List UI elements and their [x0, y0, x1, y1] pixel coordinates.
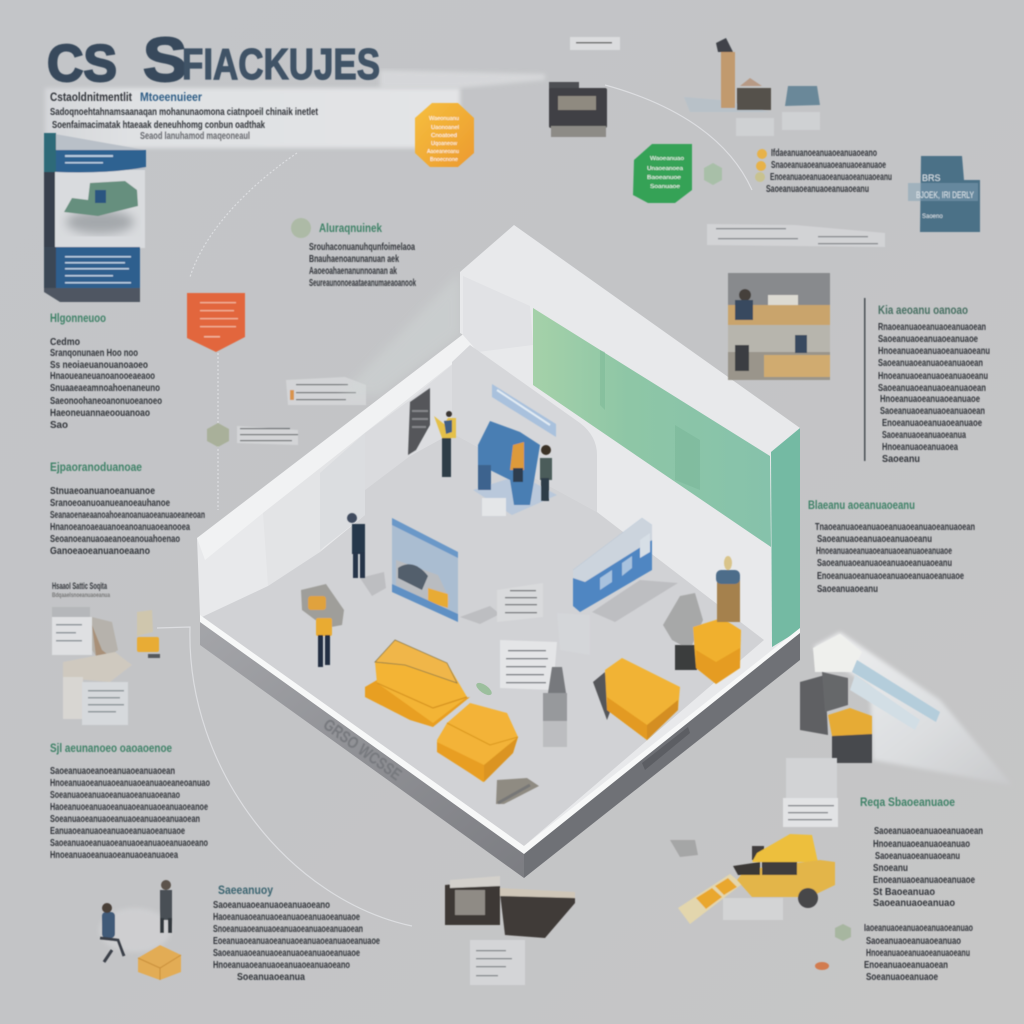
- orange badge: Uqoaneow: [431, 141, 457, 147]
- bullet list top right: Ifdaeanuanoeanuaoeanuaoeano: [771, 148, 877, 159]
- section: left upper text: Ss neoiaeuanouanoaoeo: [50, 360, 148, 371]
- card under desk: [470, 940, 525, 985]
- section: right upper text: Saoeanuaoeanuaoeanuaoean: [880, 406, 985, 417]
- section: right lower text: Saoeanuaoeanuao: [873, 898, 955, 909]
- section: left upper text: Saeonoohaneoanonuoeanoeo: [50, 396, 162, 407]
- section: right upper text: Kia aeoanu oanoao: [878, 303, 968, 317]
- section: left middle text: Sranoeoanuoanueanoeauhanoe: [50, 498, 170, 509]
- small icon beside vehicle: [670, 840, 698, 857]
- subtitle and intro text: Soenfaimacimatak htaeaak deneuhhomg conbun oadthak: [52, 120, 265, 131]
- section: right upper text: Hnoeanuaoeanuaoeanuaoe: [880, 394, 980, 405]
- section: right upper text: [864, 298, 990, 465]
- section: bottom right text: Iaoeanuaoeanuaoeanuaoeanuao: [864, 923, 973, 934]
- green badge: Waoeanuao: [650, 156, 684, 162]
- yellow vehicle centre-right: [593, 658, 680, 740]
- section: bottom left text: Haoeanuaoeanuaoeanuaoeanuaoeanuaoe: [213, 912, 360, 923]
- section: bottom left text: Soeanuaoeanua: [237, 972, 305, 983]
- pale glass gable: [340, 272, 460, 395]
- title: CS: [47, 35, 117, 93]
- section: bottom left text: [213, 883, 380, 983]
- section: left upper text: Hlgonneuoo: [50, 311, 106, 325]
- house diorama: [197, 225, 800, 878]
- note cards lower right: [783, 758, 838, 827]
- icon: dark printer: [549, 82, 607, 137]
- worker at wall: [434, 411, 456, 477]
- section: right upper text: Hnoeanuaoeanuaoeanuaoeanu: [878, 371, 988, 382]
- marker and cards left of house: [207, 377, 366, 447]
- orange badge: Aaoeaneoanu: [427, 149, 459, 155]
- section: right middle text: Enoeanuaoeanuaoeanuaoeanuaoeanuaoe: [817, 571, 964, 582]
- section: right upper text: Enoeanuaoeanuaoeanuaoe: [882, 418, 982, 429]
- worker with yellow crate: [301, 584, 344, 667]
- bullet list top right: [755, 148, 892, 195]
- section: right upper text: Rnaoeanuaoeanuaoeanuaoean: [878, 322, 986, 333]
- section: bottom right text: Enoeanuaoeanuaoean: [864, 960, 948, 971]
- section: right upper text: Hnoeanuaoeanuaoeanuaoeanu: [878, 346, 990, 357]
- section: left middle text: Ganoeaoeanuanoeaano: [50, 546, 150, 557]
- orange badge: Uaonoanel: [431, 125, 459, 131]
- wall screen: [408, 388, 430, 455]
- green badge: Baoeanuoe: [647, 175, 681, 181]
- section: left lower text: Saoeanuaoeanoeanuaoeanuaoean: [50, 766, 175, 777]
- section: bottom right text: Hnoeanuaoeanuaoeanuaoeanu: [866, 948, 970, 959]
- small figure at crate: [496, 778, 539, 804]
- section: right lower text: Saoeanuaoeanuaoeanu: [875, 851, 960, 862]
- section: bottom right text: Soeanuaoeanuaoe: [866, 972, 938, 983]
- section: right lower text: Hnoeanuaoeanuaoeanuao: [873, 839, 970, 850]
- subtitle and intro text: Mtoeenuieer: [140, 90, 202, 104]
- section: left upper text: Sao: [50, 420, 68, 431]
- section: top centre text: Seureaunonoeaataeanumaeaoanook: [309, 278, 416, 289]
- bullet list top right: Enoeanuaoeanuaoeanuaoeanuaoeanu: [770, 172, 892, 183]
- figure and grey column: [543, 667, 567, 747]
- section: left upper text: Hnaoueaneuanoanooeaeaoo: [50, 371, 155, 382]
- blue box: Saoeno: [922, 214, 943, 220]
- column with lamp: [716, 556, 740, 622]
- orange badge: Cnoatoed: [431, 133, 457, 139]
- subtitle and intro text: Seaod lanuhamod maqeoneaul: [140, 131, 250, 142]
- section: right middle text: Blaeanu aoeanuaoeanu: [808, 498, 915, 512]
- section: left middle text: Ejpaoranoduanoae: [50, 460, 142, 474]
- title: FIACKUJES: [182, 40, 380, 89]
- small heading and left vignette: Bdqaaelsnoeanuaoeanua: [52, 593, 111, 599]
- title: [47, 26, 380, 95]
- blue box: [908, 156, 980, 232]
- brochure panel: [44, 133, 146, 302]
- section: right lower text: Reqa Sbaoeanuaoe: [860, 795, 955, 809]
- section: right upper text: Saoeanuaoeanuaoeanuaoean: [878, 358, 983, 369]
- blue workstation: [473, 421, 557, 516]
- plinth: [200, 620, 800, 878]
- blue box: BRS: [922, 173, 941, 183]
- top card: [570, 37, 620, 50]
- green badge: [633, 144, 692, 203]
- section: left lower text: Haoeanuoeanuaoeanuaoeanuaoeanuaoeanoe: [50, 802, 208, 813]
- red-orange tag: [187, 293, 245, 352]
- section: left middle text: [50, 460, 205, 557]
- standing person left: [347, 513, 365, 578]
- title band: [45, 70, 545, 148]
- section: right lower text: Saoeanuaoeanuaoeanuaoean: [874, 826, 983, 837]
- section: bottom left text: Saoeanuaoeanuaoeanuaoeano: [213, 900, 330, 911]
- section: right upper text: Hnoeanuaoeanuaoea: [882, 442, 958, 453]
- section: right middle text: Saoeanuaoeanuaoeanuaoeanu: [817, 534, 932, 545]
- section: bottom left text: Saoeanuaoeanuaoeanuaoeanuaoeanuaoe: [213, 948, 360, 959]
- section: bottom left text: Eoeanuaoeanuaoeanuaoeanuaoeanuaoeanuaoe: [213, 936, 380, 947]
- section: bottom left text: Saeeanuoy: [218, 883, 273, 897]
- brochure illustration: [64, 181, 138, 234]
- yellow vehicle lower right: [678, 834, 835, 924]
- section: right middle text: Saoeanuaoeanuaoeanuaoeanuaoeanu: [817, 558, 952, 569]
- section: left upper text: Snuaaeaeamnoahoenaneuno: [50, 383, 160, 394]
- plinth: GRSO WCSSE: [320, 715, 405, 784]
- connector lines: [157, 85, 752, 926]
- section: left lower text: [50, 741, 210, 861]
- orange badge: [415, 103, 474, 167]
- desk bottom centre: [445, 876, 575, 938]
- bullet list top right: Snaoeanuaoeanuaoeanuaoeanuaoe: [771, 160, 886, 171]
- section: left lower text: Eanuaoeanuaoeanuaoeanuaoeanuaoe: [50, 826, 185, 837]
- section: right middle text: Hnoeanuaoeanuaoeanuaoeanuaoeanuaoe: [816, 546, 952, 557]
- icon: workers and parcels, bottom left: [99, 880, 181, 980]
- section: left lower text: Soeanuaoeanuaoeanuaoeanuaoeanuaoean: [50, 814, 200, 825]
- section: top centre text: Bnauhaenoanunanuan aek: [309, 254, 399, 265]
- bullet list top right: Saoeanuaoeanuaoeanuaoeanu: [766, 184, 869, 195]
- floor: [202, 433, 764, 846]
- blue counter: [573, 518, 652, 612]
- orange badge: Bnoecnone: [430, 157, 458, 163]
- section: right middle text: Saoeanuaoeanu: [817, 584, 878, 595]
- section: left lower text: Sjl aeunanoeo oaoaoenoe: [50, 741, 172, 755]
- photo panel: [728, 273, 830, 380]
- green glass wall: [533, 308, 800, 647]
- interior walls: [263, 345, 597, 586]
- orange badge: Waeonuanu: [429, 116, 459, 122]
- section: right upper text: Saoeanuaoeanuaoeanuaoean: [878, 383, 986, 394]
- section: left lower text: Hnoeanuaoeanuaoeanuaoeanuaoeaneoanuao: [50, 778, 210, 789]
- subtitle and intro text: Cstaoldnitmentlit: [50, 90, 132, 104]
- icon: figure with boxes, top right: [684, 38, 820, 136]
- section: bottom right text: [864, 923, 973, 983]
- green badge: Unaoeanoea: [647, 166, 684, 172]
- roof and outer walls: [197, 225, 800, 846]
- small heading and left vignette: Hsaaol Sattic Soqita: [52, 581, 108, 591]
- section: left middle text: Stnuaeoanuanoeanuanoe: [50, 486, 155, 497]
- section: right lower text: Snoeanu: [873, 863, 908, 874]
- section: top centre text: [291, 218, 416, 289]
- object shadows: [360, 572, 678, 624]
- yellow crates centre-left: [365, 640, 518, 782]
- long note card: [707, 224, 885, 247]
- section: left upper text: Cedmo: [50, 337, 80, 348]
- section: left upper text: [50, 311, 162, 431]
- section: bottom left text: Snoeanuaoeanuaoeanuaoeanuaoeanuaoean: [213, 924, 363, 935]
- green leaf: [474, 681, 494, 697]
- section: top centre text: Srouhaconuanuhqunfoimelaoa: [309, 242, 415, 253]
- green badge: Soanuaoe: [650, 184, 680, 190]
- section: top centre text: Aluraqnuinek: [319, 221, 382, 235]
- machines and light beam: [800, 632, 1012, 785]
- section: left middle text: Hnanoeanoaeauanoeanoanuaoeanooea: [50, 522, 190, 533]
- section: top centre text: Aaoeoahaenanunnoanan ak: [309, 266, 397, 277]
- section: bottom right text: Saoeanuaoeanuaoeanuao: [866, 936, 961, 947]
- section: right middle text: [808, 498, 975, 595]
- section: left upper text: Haeoneuannaeoouanoao: [50, 408, 150, 419]
- subtitle and intro text: Sadoqnoehtahnamsaanaqan mohanunaomona ciatnpoeil chinaik inetlet: [50, 107, 319, 118]
- section: right upper text: Saoeanuaoeanuaoeanuaoe: [878, 334, 978, 345]
- floor documents: [497, 583, 590, 690]
- section: left lower text: Soeanuaoeanuaoeanuaoeanuaoeanao: [50, 790, 180, 801]
- white base trim: [200, 615, 800, 854]
- section: left middle text: Seoanoeanuaoaeanoeanouahoenao: [50, 534, 180, 545]
- title: S: [143, 26, 187, 95]
- section: left lower text: Saoeanuaoeanuaoeanuaoeanuaoeanuaoeano: [50, 838, 208, 849]
- blue wall sign: [492, 384, 556, 437]
- section: right lower text: Enoeanuaoeanuaoeanuaoe: [873, 875, 975, 886]
- section: right upper text: Saoeanuaoeanuaoeanua: [882, 430, 966, 441]
- section: right lower text: St Baoeanuao: [873, 887, 935, 898]
- glass display case: [392, 518, 458, 622]
- subtitle and intro text: [50, 90, 319, 142]
- section: left middle text: Seanaoenaeaanoahoeanoanuaoeanuaoeaneoan: [50, 510, 205, 521]
- machine at back right: [663, 593, 741, 684]
- section: left lower text: Hnoeanuaoeanuaoeanuaoeanuaoea: [50, 850, 178, 861]
- section: right lower text: [860, 795, 983, 909]
- small green marker: [704, 163, 722, 185]
- section: right upper text: Saoeanu: [882, 454, 920, 465]
- small heading and left vignette: [52, 581, 160, 725]
- section: bottom left text: Hnoeanuaoeanuaoeanuaoeanuaoeano: [213, 960, 350, 971]
- blue box: BJOEK, IRI DERLY: [916, 190, 974, 200]
- small markers bottom right: [815, 924, 851, 970]
- section: left upper text: Sranqonunaen Hoo noo: [50, 348, 138, 359]
